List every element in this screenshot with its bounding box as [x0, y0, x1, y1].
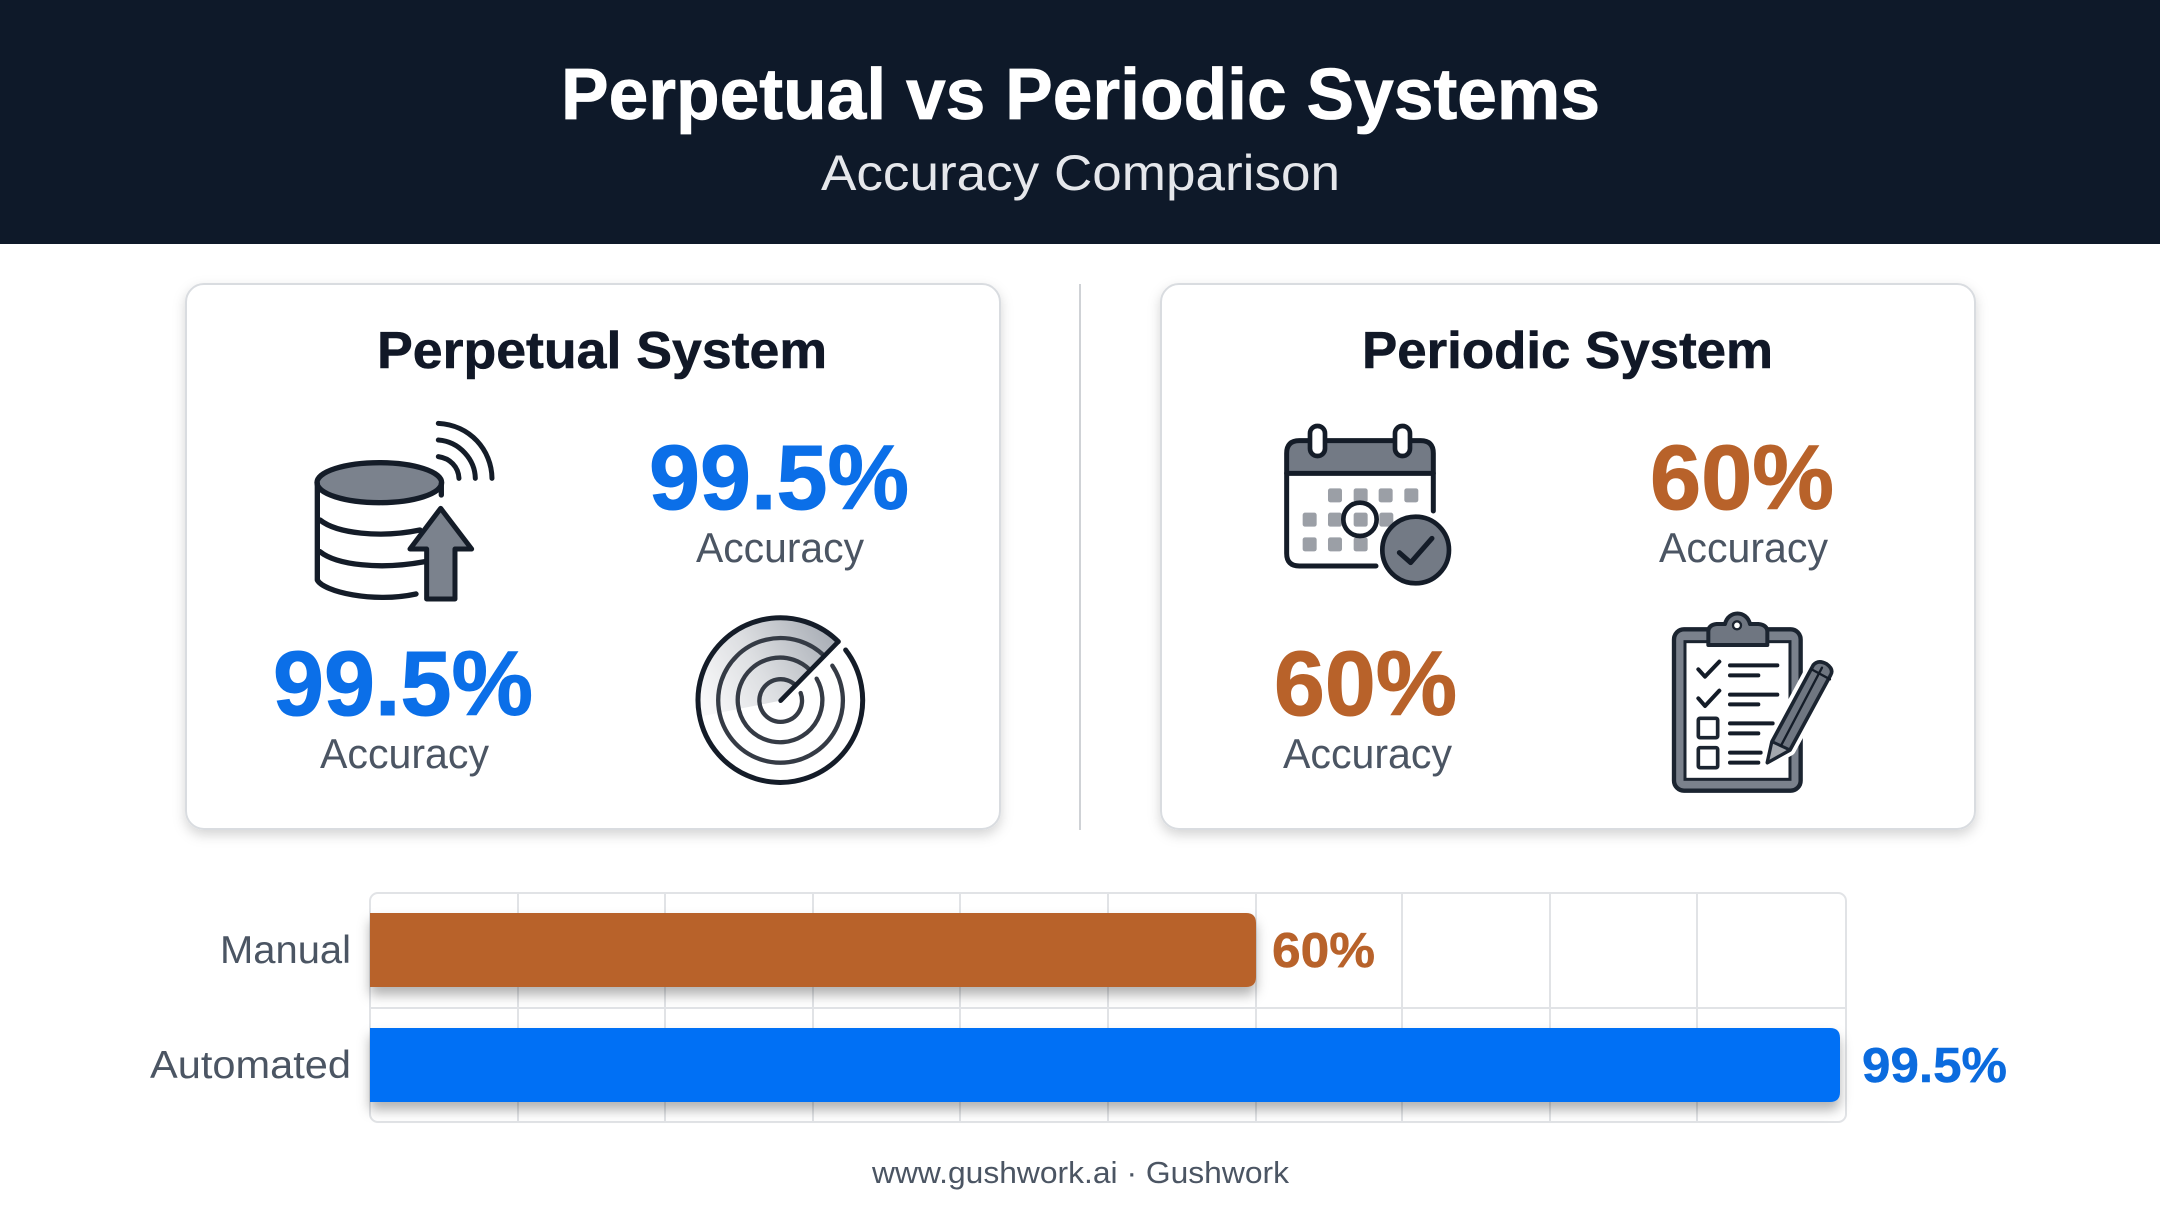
- stat: 60% accuracy top right: 60%: [1650, 427, 1834, 529]
- bar: manual: [370, 913, 1256, 987]
- panel heading: perpetual: Perpetual System: [377, 322, 827, 380]
- stat: 60% accuracy bottom left: Accuracy: [1283, 730, 1452, 777]
- panel: periodic system: [1161, 284, 1975, 829]
- icon: calendar with check: [1287, 426, 1449, 583]
- value: 99.5%: 99.5%: [1862, 1039, 2007, 1093]
- divider: [1079, 284, 1081, 830]
- value: 60%: 60%: [1272, 924, 1375, 978]
- stat: 99.5% accuracy top right: 99.5%: [649, 427, 909, 529]
- footer source: www.gushwork.ai · Gushwork: [871, 1155, 1290, 1190]
- label: automated: Automated: [150, 1044, 351, 1087]
- header band: [0, 0, 2160, 244]
- chart: accuracy bars: [150, 893, 2007, 1122]
- label: manual: Manual: [220, 929, 351, 972]
- stat: 99.5% accuracy top right: Accuracy: [696, 524, 864, 571]
- stat: 99.5% accuracy bottom left: 99.5%: [273, 633, 533, 735]
- title: Perpetual vs Periodic Systems: [561, 55, 1600, 135]
- subtitle: Accuracy Comparison: [821, 145, 1340, 201]
- bar: automated: [370, 1028, 1840, 1102]
- panel heading: periodic: Periodic System: [1362, 322, 1773, 380]
- stat: 60% accuracy bottom left: 60%: [1274, 633, 1457, 735]
- icon: clipboard checklist with pencil: [1674, 613, 1832, 791]
- icon: database with upload arrow and signal: [317, 423, 492, 599]
- panel: perpetual system: [186, 284, 1000, 829]
- stat: 99.5% accuracy bottom left: Accuracy: [320, 730, 489, 777]
- stat: 60% accuracy top right: Accuracy: [1659, 524, 1828, 571]
- icon: radar target: [698, 618, 863, 782]
